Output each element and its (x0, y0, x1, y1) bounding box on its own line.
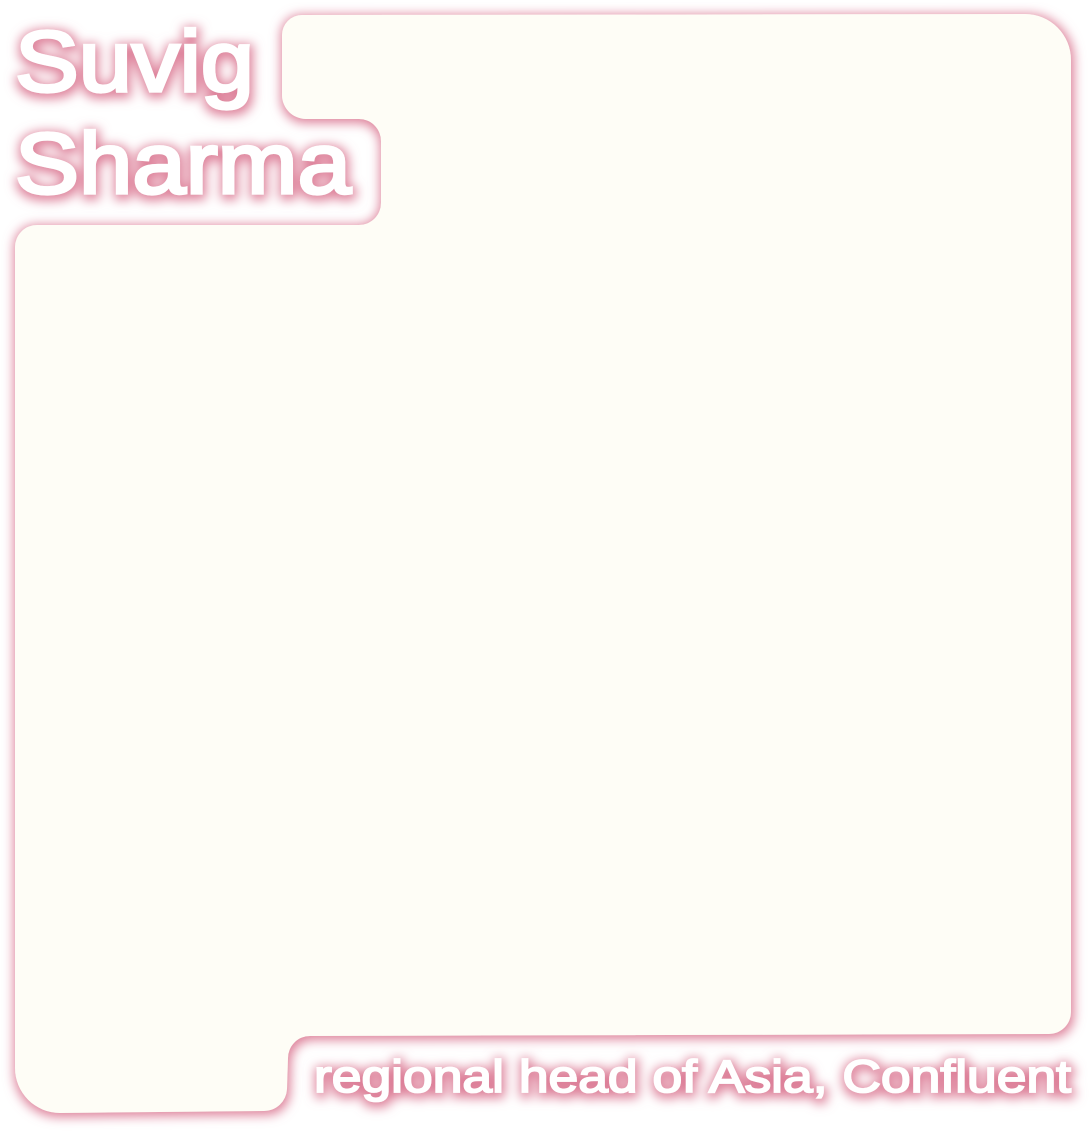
heading line: Suvig: Suvig (15, 14, 254, 110)
heading line: Sharma: Sharma (15, 116, 351, 212)
subtitle: role: regional head of Asia, Confluent (314, 1051, 1072, 1102)
heading: Suvig Sharma (15, 14, 351, 212)
